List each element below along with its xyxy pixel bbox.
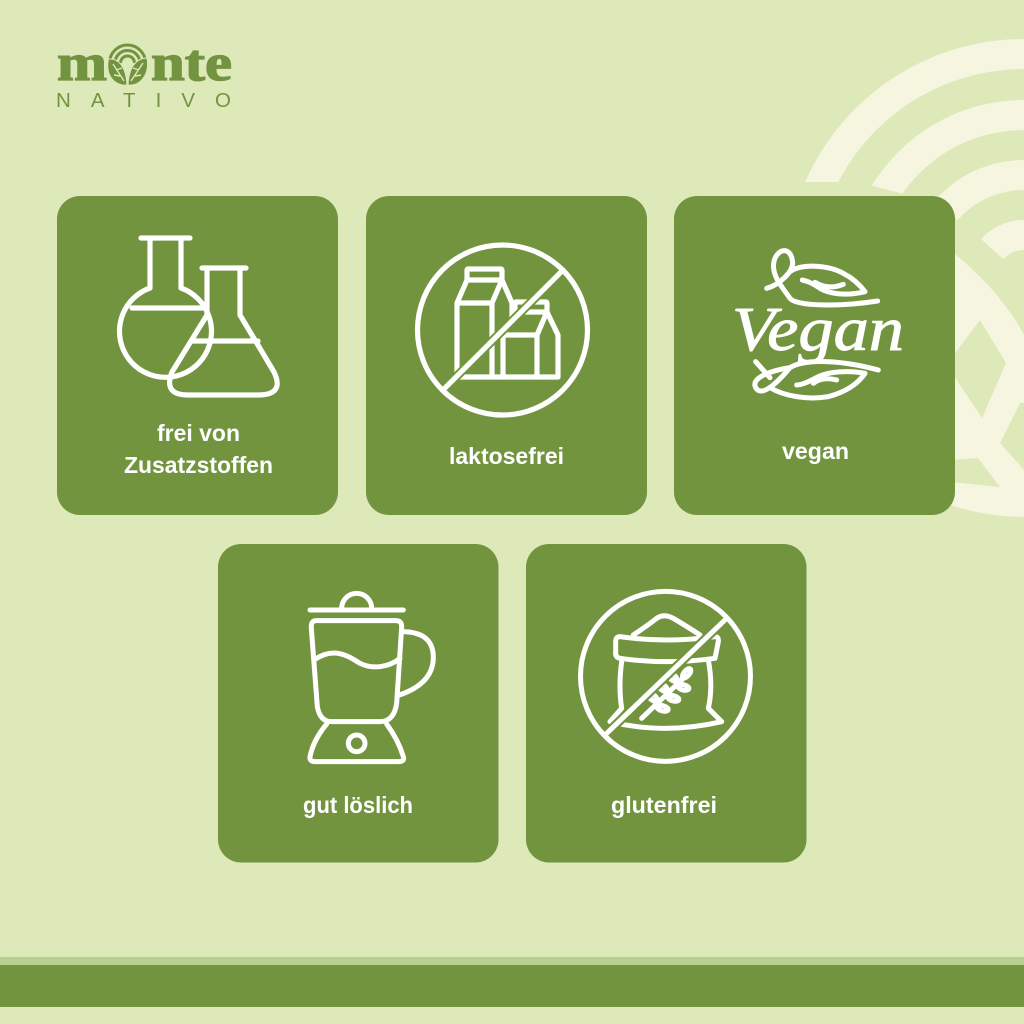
icon: crossed-out milk cartons [418, 245, 588, 415]
panel: glutenfrei [526, 544, 806, 862]
label: vegan [782, 438, 849, 464]
panel: laktosefrei [366, 196, 647, 515]
icon: vegan lettering [732, 251, 904, 398]
logo subtitle: NATIVO [56, 89, 231, 112]
panel: gut löslich [218, 544, 498, 862]
icon: vegan lettering: Vegan [732, 296, 904, 364]
logo wordmark: nte: nte [151, 35, 232, 92]
footer band [0, 957, 1024, 1007]
label: Zusatzstoffen [124, 452, 273, 478]
icon: flasks [120, 238, 277, 395]
panel: vegan [674, 196, 955, 515]
label: laktosefrei [449, 443, 564, 469]
label: gut löslich [303, 792, 413, 818]
icon: crossed-out flour sack [580, 591, 750, 761]
label: glutenfrei [611, 792, 717, 818]
icon: blender [310, 593, 433, 762]
logo wordmark: m: m [57, 35, 107, 92]
logo emblem [108, 45, 148, 85]
logo [56, 35, 232, 112]
panel: frei von Zusatzstoffen [57, 196, 338, 515]
label: frei von [157, 420, 240, 446]
watermark: logo emblem [800, 54, 1024, 517]
